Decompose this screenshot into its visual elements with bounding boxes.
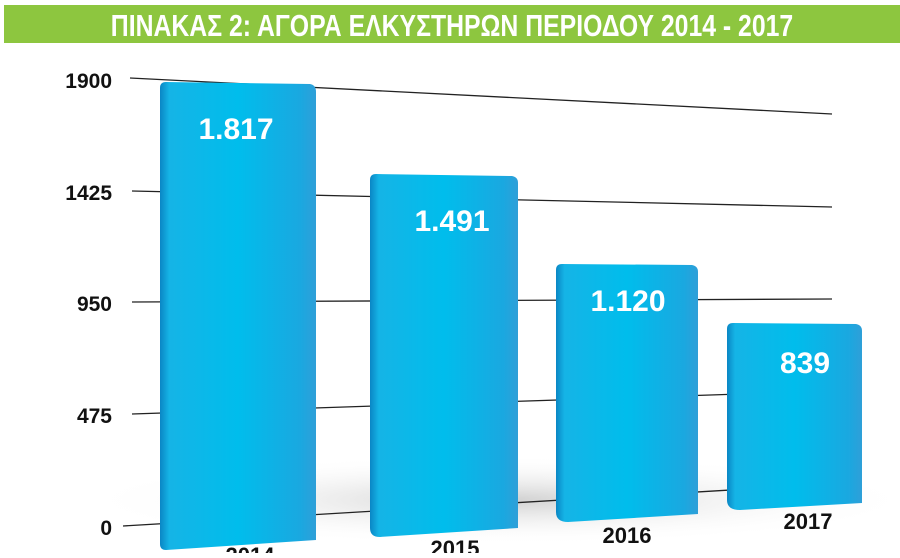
bar 2016 (556, 264, 698, 522)
y axis labels: 950 (77, 293, 112, 316)
x axis labels: 2017 (784, 509, 832, 534)
y axis labels: 0 (100, 517, 112, 540)
title bar: ΠΙΝΑΚΑΣ 2: ΑΓΟΡΑ ΕΛΚΥΣΤΗΡΩΝ ΠΕΡΙΟΔΟΥ 2014 - 2017 (111, 8, 793, 43)
y axis labels: 475 (77, 405, 112, 428)
bar 2014 (160, 82, 316, 550)
shadow (80, 455, 900, 545)
bar 2016: 1.120 (590, 285, 666, 318)
y axis labels (65, 70, 112, 540)
x axis labels: 2016 (603, 523, 651, 548)
y axis labels: 1900 (65, 70, 112, 93)
bar 2015 (370, 174, 518, 537)
bar 2017: 839 (780, 347, 830, 380)
title bar (4, 5, 900, 43)
bar 2015: 1.491 (414, 205, 490, 238)
bar 2014: 1.817 (198, 113, 274, 146)
bar 2017 (727, 323, 862, 510)
x axis labels (226, 509, 832, 558)
y axis labels: 1425 (65, 182, 112, 205)
